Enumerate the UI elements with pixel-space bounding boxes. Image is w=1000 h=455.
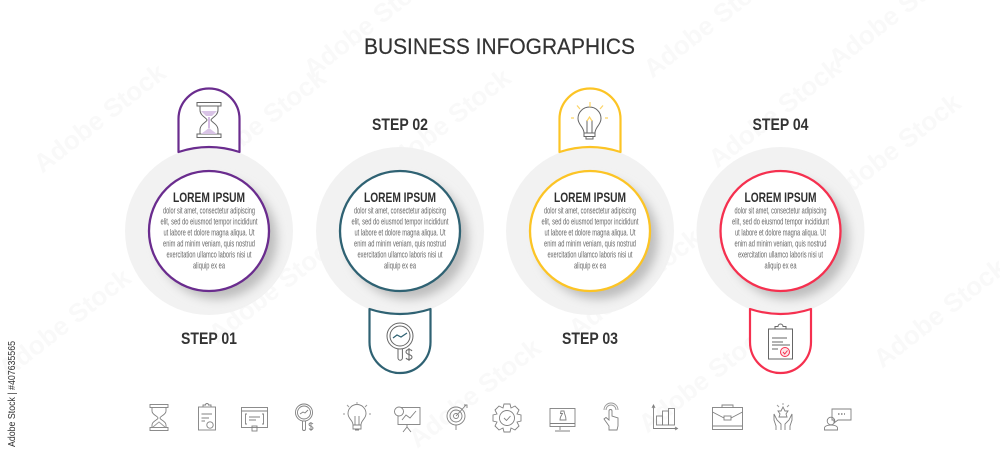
watermark: Adobe Stock [188,62,332,184]
stock id side label: Adobe Stock | #407635565 [7,341,18,447]
card text 1: exercitation ullamco laboris nisi ut [166,250,252,260]
card text 4: dolor sit amet, consectetur adipiscing [734,206,826,216]
shadow 3 [538,179,658,299]
card text 4: LOREM IPSUM [744,189,816,205]
outer disc 2 [316,147,484,315]
watermark: Adobe Stock [403,332,547,454]
card text 3: enim ad minim veniam, quis nostrud [544,238,636,250]
card text 2: exercitation ullamco laboris nisi ut [358,250,443,260]
card text 2: elit, sed do eiusmod tempor incididunt [352,216,449,228]
card text 2: LOREM IPSUM [364,189,436,205]
icon row [150,402,851,432]
step label 3: STEP 03 [562,329,618,348]
circle card 1 [149,171,269,291]
icon: pointing hand [604,403,618,430]
icon: presentation board [394,407,420,432]
shadow 4 [728,179,848,299]
icon: hands holding star [774,403,792,430]
tab with magnifier icon [370,309,430,373]
card text 3: dolor sit amet, consectetur adipiscing [544,206,636,216]
panel: step 02 [316,115,484,373]
card text 2 [352,189,449,272]
panel: step 04 [696,115,864,373]
card text 3: exercitation ullamco laboris nisi ut [548,250,633,260]
card text 4: elit, sed do eiusmod tempor incididunt [732,216,829,228]
icon: target with arrow [447,405,467,430]
step label 4: STEP 04 [752,115,809,134]
outer disc 3 [506,147,674,315]
card text 4 [732,189,829,272]
watermark: Adobe Stock [633,317,777,439]
watermark: Adobe Stock [703,52,847,174]
card text 4: aliquip ex ea [764,260,797,272]
title: BUSINESS INFOGRAPHICS [364,34,635,59]
outer disc 4 [696,147,864,315]
step label 1: STEP 01 [181,329,237,348]
card text 1: elit, sed do eiusmod tempor incididunt [160,216,258,228]
watermark: Adobe Stock [823,87,967,209]
icon: certificate window [242,408,268,431]
circle card 2 [340,171,460,291]
icon: magnifier with dollar [296,404,313,431]
card text 3: ut labore et dolore magna aliqua. Ut [544,228,636,238]
tab with light bulb icon [560,88,620,152]
card text 1: enim ad minim veniam, quis nostrud [163,238,255,250]
icon: gear with check [493,404,521,432]
card text 1: ut labore et dolore magna aliqua. Ut [164,228,255,238]
outer disc 1 [125,147,293,315]
card text 1: LOREM IPSUM [173,189,245,205]
card text 1: aliquip ex ea [193,260,225,272]
step label 2: STEP 02 [372,115,428,134]
card text 1 [160,189,258,272]
watermark: Adobe Stock [28,57,172,179]
icon: light bulb [343,402,371,430]
card text 2: dolor sit amet, consectetur adipiscing [354,206,446,216]
watermark: Adobe Stock [203,227,347,349]
circle card 3 [530,171,650,291]
icon: monitor with money bag [550,408,575,431]
icon: hourglass [150,404,168,430]
shadow 1 [157,179,277,299]
panel: step 03 [506,88,674,348]
card text 3: elit, sed do eiusmod tempor incididunt [542,216,639,228]
panel: step 01 [125,88,293,348]
card text 4: ut labore et dolore magna aliqua. Ut [735,228,826,238]
tab with clipboard icon [750,309,811,373]
card text 3 [542,189,639,272]
icon: clipboard [198,404,216,430]
card text 2: aliquip ex ea [384,260,416,272]
watermark: Adobe Stock [563,222,707,344]
card text 2: ut labore et dolore magna aliqua. Ut [354,228,446,238]
card text 3: aliquip ex ea [574,260,606,272]
card text 4: enim ad minim veniam, quis nostrud [734,238,826,250]
card text 4: exercitation ullamco laboris nisi ut [738,250,823,260]
shadow 2 [348,179,468,299]
icon: bar chart [652,405,678,430]
tab with hourglass icon [178,88,240,152]
card text 3: LOREM IPSUM [554,189,626,205]
card text 2: enim ad minim veniam, quis nostrud [354,238,446,250]
icon: person with speech bubble [824,409,851,430]
watermark: Adobe Stock [373,62,517,184]
icon: briefcase [712,405,742,430]
circle card 4 [720,171,840,291]
card text 1: dolor sit amet, consectetur adipiscing [163,206,255,216]
